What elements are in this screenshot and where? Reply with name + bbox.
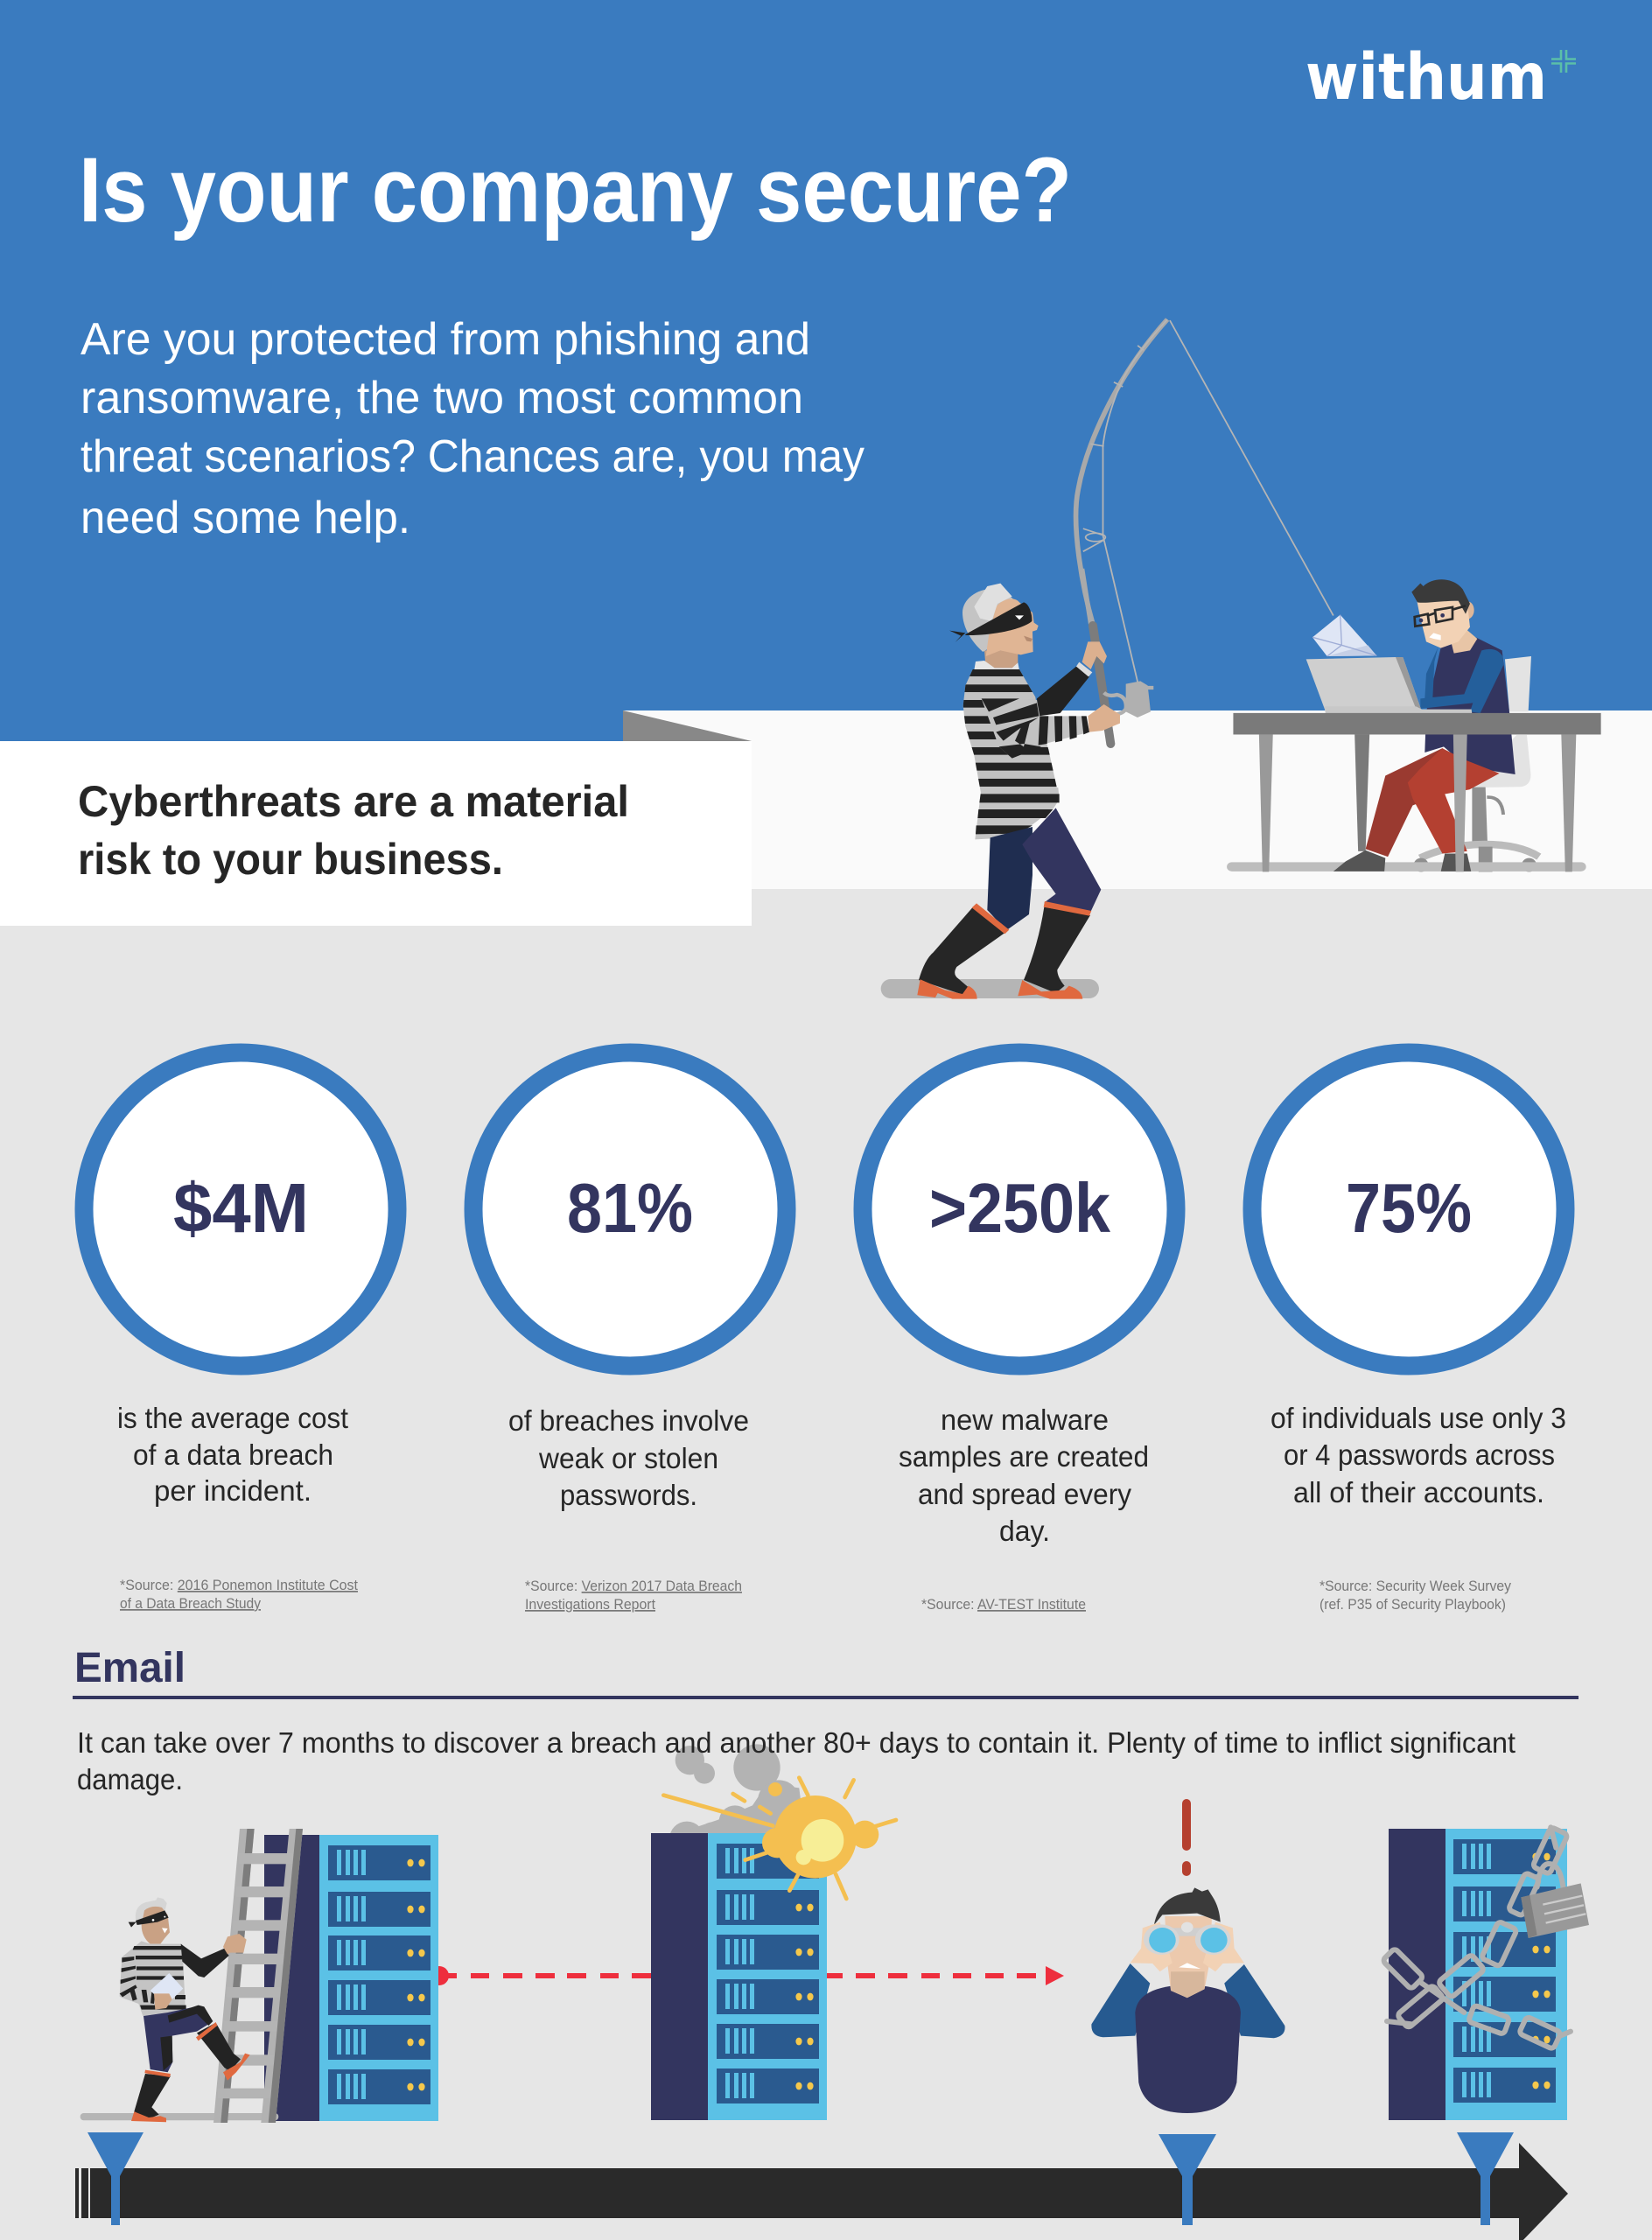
sources: Investigations Report [525,1596,655,1613]
sources: (ref. P35 of Security Playbook) [1320,1596,1506,1613]
stat text: malware: and spread every [918,1478,1131,1510]
head [1451,630,1477,654]
rod handle [1082,569,1091,624]
stat: $4M: $4M [173,1169,309,1247]
title: Is your company secure? [79,139,1072,242]
shirt [963,669,1059,796]
stat text: average cost: per incident. [154,1474,312,1507]
fishing line [1170,320,1334,615]
illustration: man at desk [1227,579,1601,872]
torso [1424,637,1516,774]
neck and collar [984,650,1018,668]
stat text: passwords [1270,1402,1566,1508]
hands [1082,641,1107,669]
stat text: malware: samples are created [899,1440,1149,1473]
illustration: phishing thief [881,319,1334,999]
head [962,589,1018,652]
panel: cyberthreats heading [0,741,752,926]
stat text: passwords: or 4 passwords across [1284,1438,1555,1471]
body text: damage. [77,1763,183,1796]
stat text: malware: day. [999,1515,1050,1547]
sources: *Source: AV-TEST Institute [921,1596,1086,1613]
sources: *Source: Security Week Survey [1320,1578,1511,1594]
raised arm [1037,667,1089,716]
intro text: ransomware, the two most common [80,373,803,424]
stat text: breaches: passwords. [560,1479,697,1511]
exclamation mark [1182,1799,1191,1876]
intro text: Are you protected from phishing and [80,314,810,365]
laptop [1306,657,1422,711]
body text: It can take over 7 months to discover a breach and another 80+ days to contain it. Plenty of time to inflict significant [77,1726,1516,1759]
stat text: malware: new malware [941,1404,1109,1436]
red trousers [1366,748,1470,857]
logo: withum: withum [1306,40,1547,115]
sources: of a Data Breach Study [120,1595,261,1612]
chair back [1467,656,1531,788]
blue header band [0,0,1652,741]
smoke [669,1744,805,1857]
timeline arrow [75,2143,1568,2240]
stat text: passwords: of individuals use only 3 [1270,1402,1566,1434]
stat text: breaches [508,1404,749,1511]
stat text: malware [899,1404,1149,1547]
stat: 81% [473,1053,787,1366]
stat: $4M [84,1053,397,1366]
heading: Email: Email [74,1645,186,1691]
stat: >250k: >250k [929,1169,1110,1247]
stat: 75% [1252,1053,1565,1366]
stat: 81%: 81% [567,1169,693,1247]
rod [1076,319,1167,625]
intro text: need some help. [80,493,410,543]
desk top and front legs [1233,713,1601,734]
sources: *Source: 2016 Ponemon Institute Cost [120,1577,358,1593]
server 2 [651,1833,827,2120]
off-white band [0,710,1652,889]
reel [1126,681,1151,718]
lower arm sleeve [982,698,1089,759]
floor shadow [1227,862,1586,872]
timeline pin 1 [88,2132,144,2225]
icon: chain and padlock [1382,1827,1589,2049]
body text [77,1726,1516,1796]
intro text: threat scenarios? Chances are, you may [80,431,864,482]
sources [120,1577,1511,1613]
stat text: breaches: weak or stolen [538,1442,718,1474]
stat text: passwords: all of their accounts. [1293,1476,1544,1508]
stat: >250k [863,1053,1176,1366]
stat: 75%: 75% [1346,1169,1472,1247]
stat text: average cost [117,1402,348,1507]
icon: explosion [663,1778,896,1899]
sources: *Source: Verizon 2017 Data Breach [525,1578,742,1594]
stat text: average cost: is the average cost [117,1402,348,1434]
stat text: breaches: of breaches involve [508,1404,749,1437]
intro text [80,314,864,543]
arrow: dashed red line [430,1966,1064,1985]
folded corner [623,710,752,741]
chair base [1472,788,1488,842]
desk back legs [1259,734,1273,872]
panel: cyberthreats heading: Cyberthreats are a material [78,777,629,826]
illustration: man with binoculars [1091,1887,1285,2113]
server 3 [1389,1829,1567,2120]
envelope [1312,615,1376,656]
stat text: average cost: of a data breach [133,1438,333,1471]
thief lower body [881,788,1101,999]
panel: cyberthreats heading: risk to your business. [78,835,503,884]
server 1 with ladder [80,1829,438,2123]
timeline pin 3 [1457,2132,1514,2225]
shoes [1334,850,1385,872]
ladder and thief [80,1829,303,2123]
timeline pin 2 [1158,2134,1216,2225]
